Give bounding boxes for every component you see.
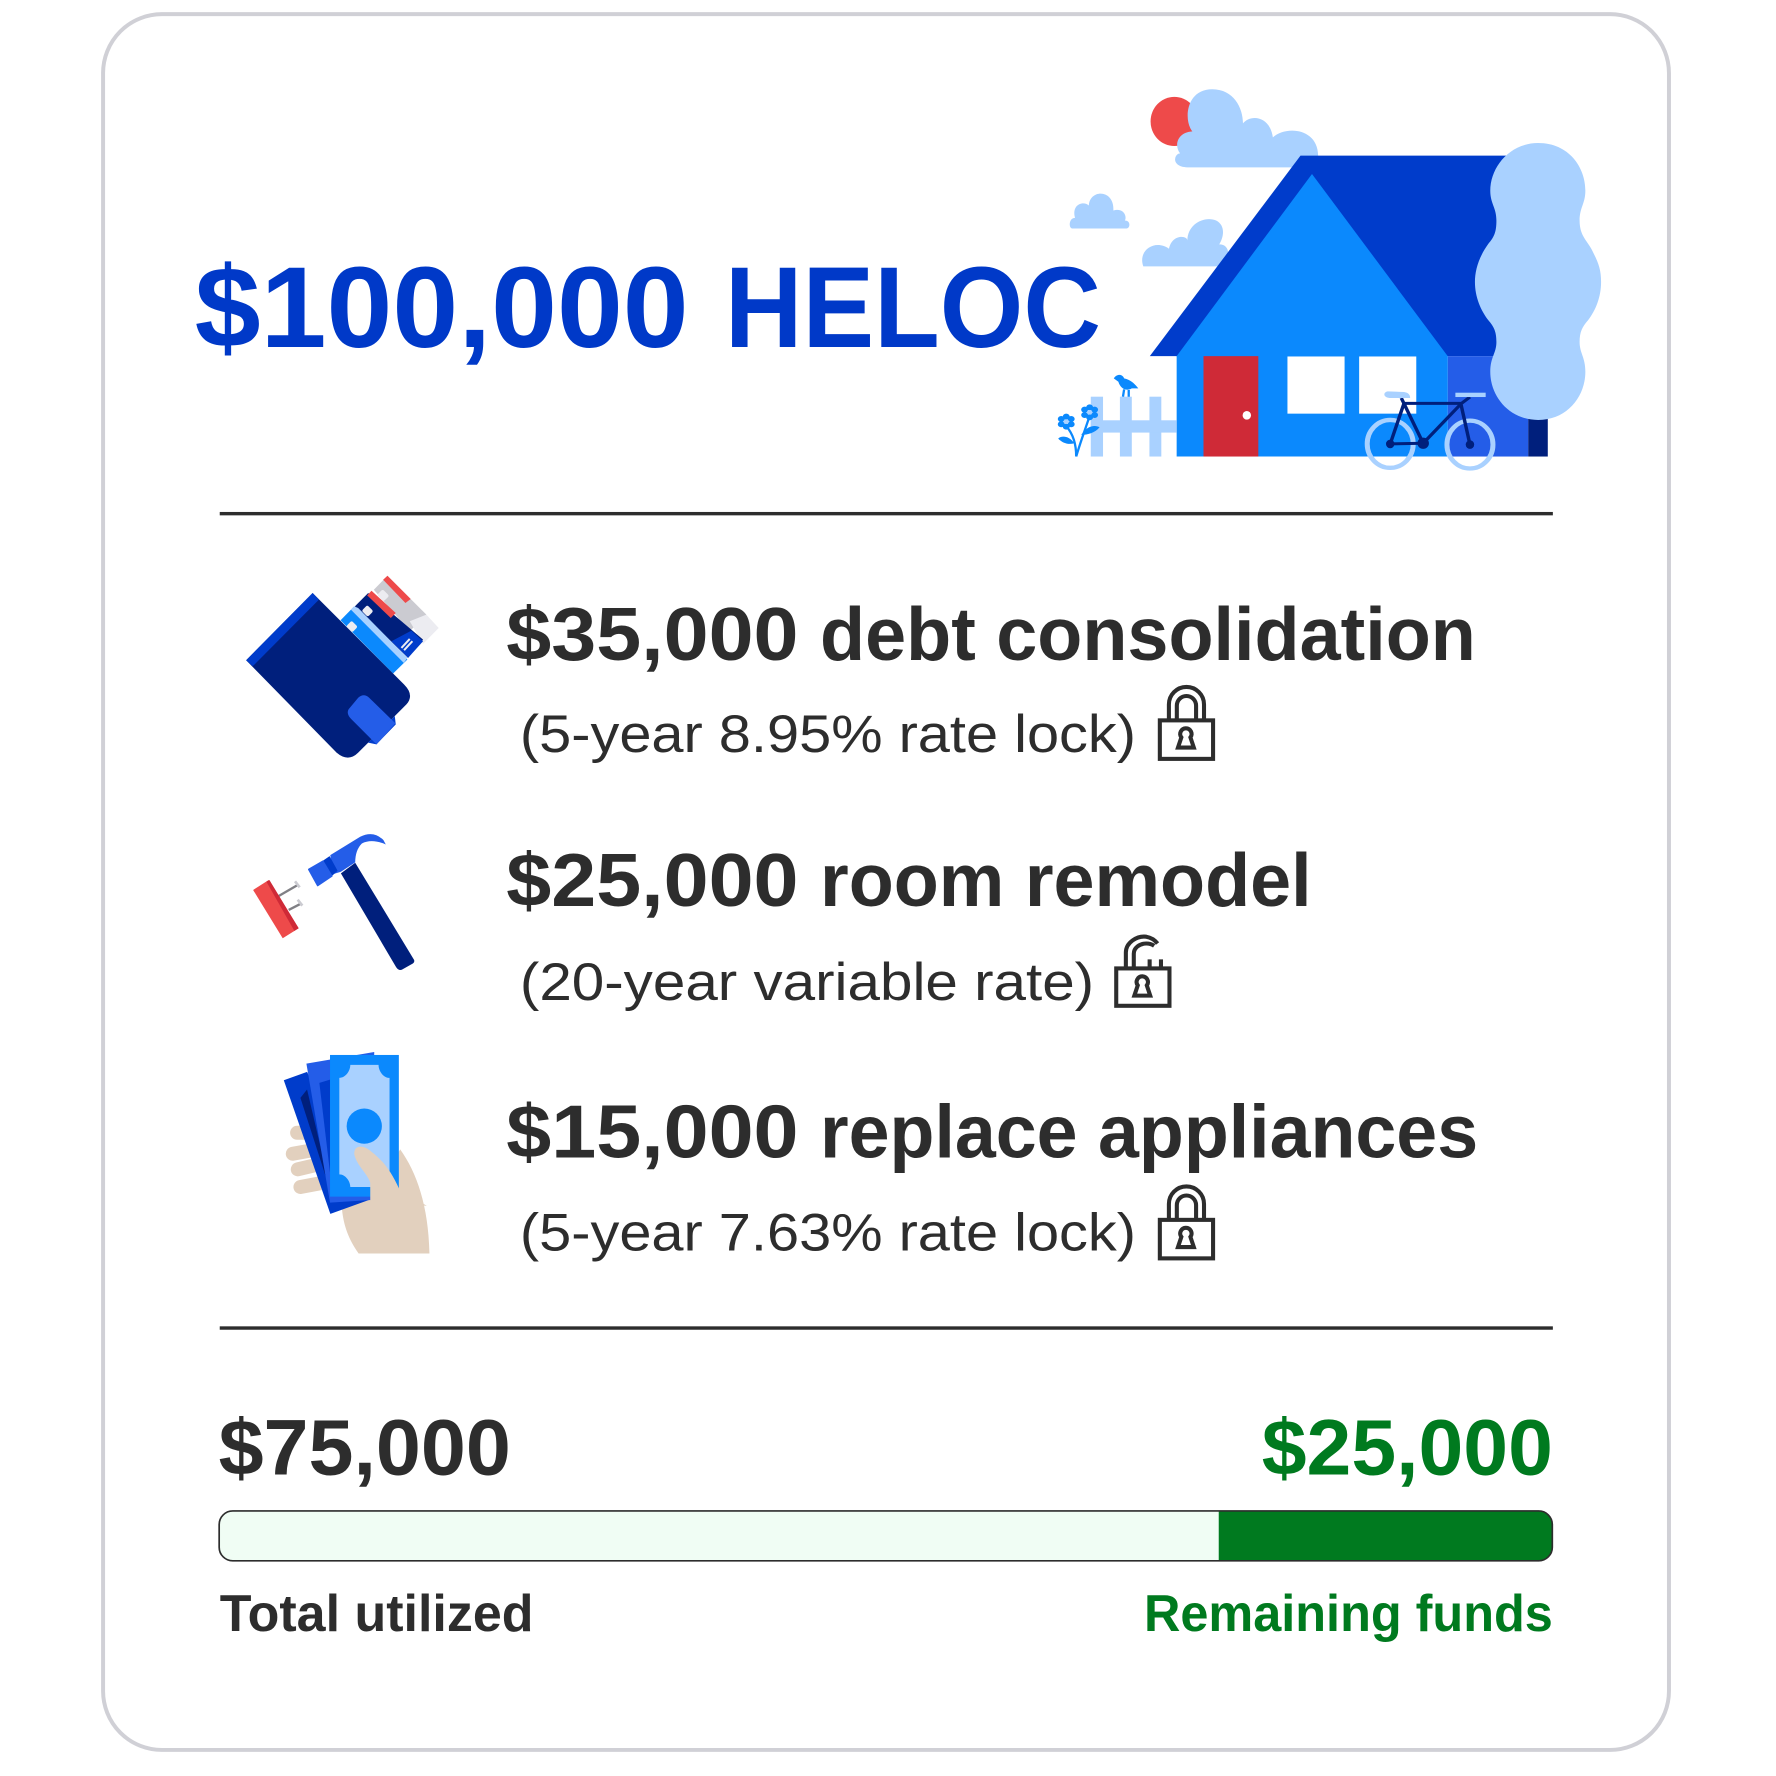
row 1 detail: (5-year 8.95% rate lock) bbox=[520, 705, 1136, 764]
row 1 heading: $35,000 bbox=[506, 592, 799, 676]
icon: flowers bbox=[1058, 404, 1100, 457]
icon: open lock bbox=[1116, 937, 1169, 1006]
row 3 heading: replace appliances bbox=[820, 1090, 1478, 1174]
progress bar bbox=[219, 1511, 1552, 1561]
icon: hand holding money bbox=[284, 1052, 429, 1253]
row 1 heading: debt consolidation bbox=[820, 592, 1476, 676]
row 2 heading: room remodel bbox=[820, 838, 1312, 922]
fence bbox=[1091, 397, 1177, 457]
row 2 heading bbox=[506, 838, 1312, 922]
tree bbox=[1475, 143, 1601, 420]
icon: sun bbox=[1151, 97, 1198, 146]
divider bottom bbox=[220, 1326, 1553, 1330]
row 3 detail: (5-year 7.63% rate lock) bbox=[520, 1203, 1136, 1262]
icon: bird bbox=[1114, 375, 1138, 397]
house side wall bbox=[1448, 356, 1528, 457]
icon: middle cloud bbox=[1142, 219, 1228, 266]
row 3 heading: $15,000 bbox=[506, 1090, 799, 1174]
house shadow wall bbox=[1528, 356, 1548, 457]
icon: large cloud bbox=[1175, 89, 1318, 167]
divider top bbox=[220, 512, 1553, 515]
row 2 detail: (20-year variable rate) bbox=[520, 953, 1094, 1012]
title: $100,000 bbox=[195, 243, 689, 372]
window left bbox=[1287, 356, 1345, 414]
remaining funds label: Remaining funds bbox=[1144, 1585, 1553, 1643]
row 1 heading bbox=[506, 592, 1476, 676]
total utilized amount: $75,000 bbox=[219, 1403, 511, 1492]
icon: closed lock bbox=[1160, 1186, 1213, 1258]
icon: wallet with cards bbox=[246, 576, 439, 758]
window right bbox=[1359, 356, 1416, 414]
icon: bicycle bbox=[1367, 391, 1493, 469]
house front bbox=[1177, 174, 1448, 457]
total utilized label: Total utilized bbox=[220, 1585, 533, 1643]
icon: small cloud bbox=[1070, 194, 1129, 228]
door bbox=[1203, 356, 1258, 457]
row 3 heading bbox=[506, 1090, 1478, 1174]
icon: closed lock bbox=[1160, 687, 1213, 759]
remaining funds amount: $25,000 bbox=[1262, 1403, 1553, 1492]
house roof bbox=[1150, 156, 1538, 356]
illustration: house scene bbox=[1058, 89, 1601, 469]
title bbox=[195, 243, 1101, 372]
title: HELOC bbox=[725, 243, 1101, 372]
icon: hammer and nails bbox=[253, 834, 414, 970]
row 2 heading: $25,000 bbox=[506, 838, 799, 922]
